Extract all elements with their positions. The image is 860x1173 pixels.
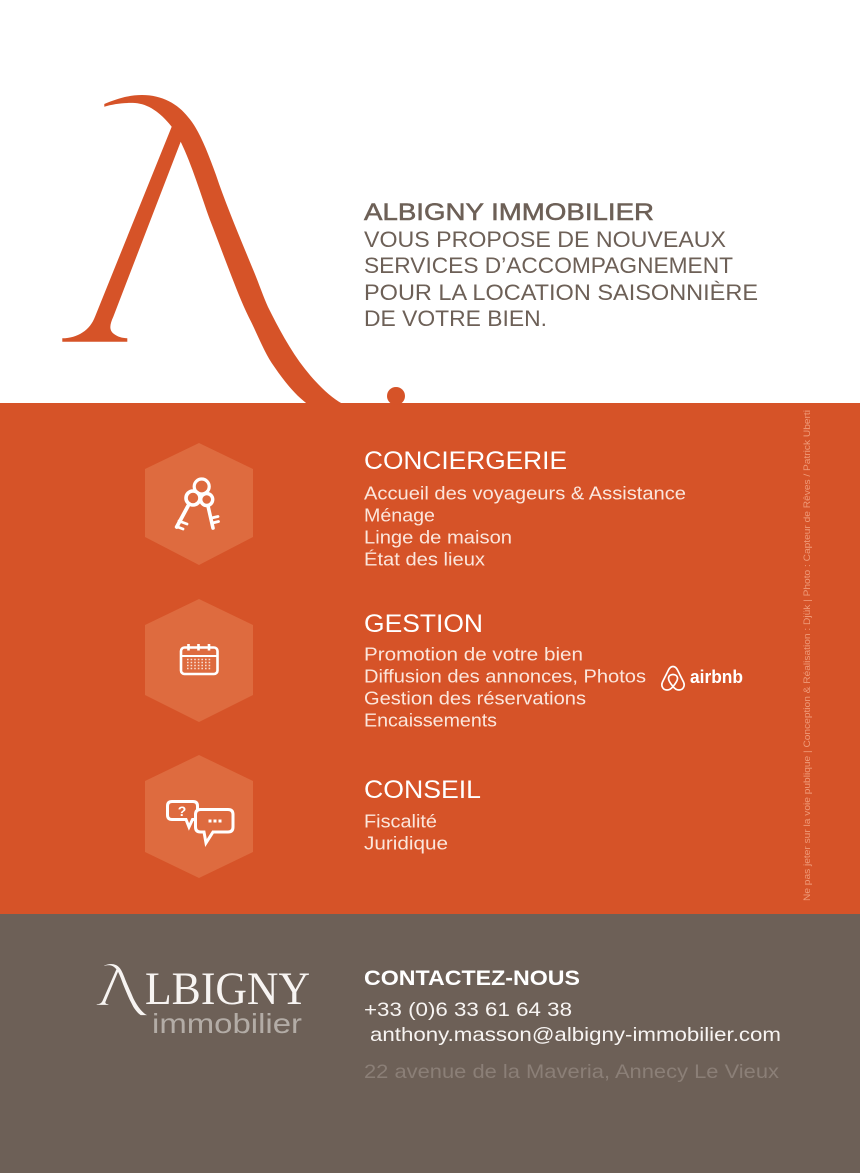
section: conseil: Juridique	[364, 834, 448, 854]
icon: chat bubbles hexagon	[145, 755, 253, 878]
icon: keys hexagon	[145, 443, 253, 565]
section: gestion: GESTION	[364, 610, 483, 638]
panel: white header background	[0, 0, 860, 403]
contact block	[364, 967, 781, 1083]
icon: calendar hexagon	[145, 599, 253, 722]
logo lambda	[97, 964, 147, 1015]
icon: airbnb logo	[662, 666, 743, 690]
section: gestion: Encaissements	[364, 710, 497, 730]
section: conciergerie	[364, 447, 686, 570]
section: conseil: CONSEIL	[364, 776, 481, 804]
logo wordmark: LBIGNY	[145, 963, 310, 1015]
intro text: VOUS PROPOSE DE NOUVEAUX	[364, 227, 726, 252]
intro text: POUR LA LOCATION SAISONNIÈRE	[364, 280, 758, 305]
logo subtitle: immobilier	[152, 1008, 302, 1039]
contact block: anthony.masson@albigny-immobilier.com	[370, 1024, 781, 1046]
section: conciergerie: Accueil des voyageurs & Assistance	[364, 484, 686, 504]
section: conciergerie: CONCIERGERIE	[364, 447, 567, 475]
icon: airbnb logo: airbnb	[690, 667, 743, 687]
contact block: +33 (0)6 33 61 64 38	[364, 999, 572, 1021]
section: gestion	[364, 610, 646, 730]
section: gestion: Diffusion des annonces, Photos	[364, 666, 646, 686]
section: gestion: Promotion de votre bien	[364, 644, 583, 664]
icon: chat bubbles hexagon: ?	[178, 803, 186, 819]
section: gestion: Gestion des réservations	[364, 688, 586, 708]
section: conciergerie: État des lieux	[364, 550, 485, 570]
section: conciergerie: Ménage	[364, 506, 435, 526]
intro text	[364, 199, 758, 331]
contact block: CONTACTEZ-NOUS	[364, 967, 580, 990]
logo: Albigny immobilier	[97, 963, 310, 1039]
section: conseil	[364, 776, 481, 854]
intro text: SERVICES D’ACCOMPAGNEMENT	[364, 253, 733, 278]
big orange lambda logo	[62, 95, 405, 405]
section: conciergerie: Linge de maison	[364, 528, 512, 548]
dot	[387, 387, 405, 405]
intro text: ALBIGNY IMMOBILIER	[364, 199, 654, 226]
section: conseil: Fiscalité	[364, 812, 437, 832]
contact block: 22 avenue de la Maveria, Annecy Le Vieux	[364, 1061, 779, 1083]
panel: grey contact background	[0, 914, 860, 1173]
panel: orange services background	[0, 403, 860, 914]
vertical credits: Ne pas jeter sur la voie publique | Conception & Réalisation : Djük | Photo : Capteur de Rêves / Patrick Uberti	[802, 410, 813, 901]
intro text: DE VOTRE BIEN.	[364, 306, 547, 331]
